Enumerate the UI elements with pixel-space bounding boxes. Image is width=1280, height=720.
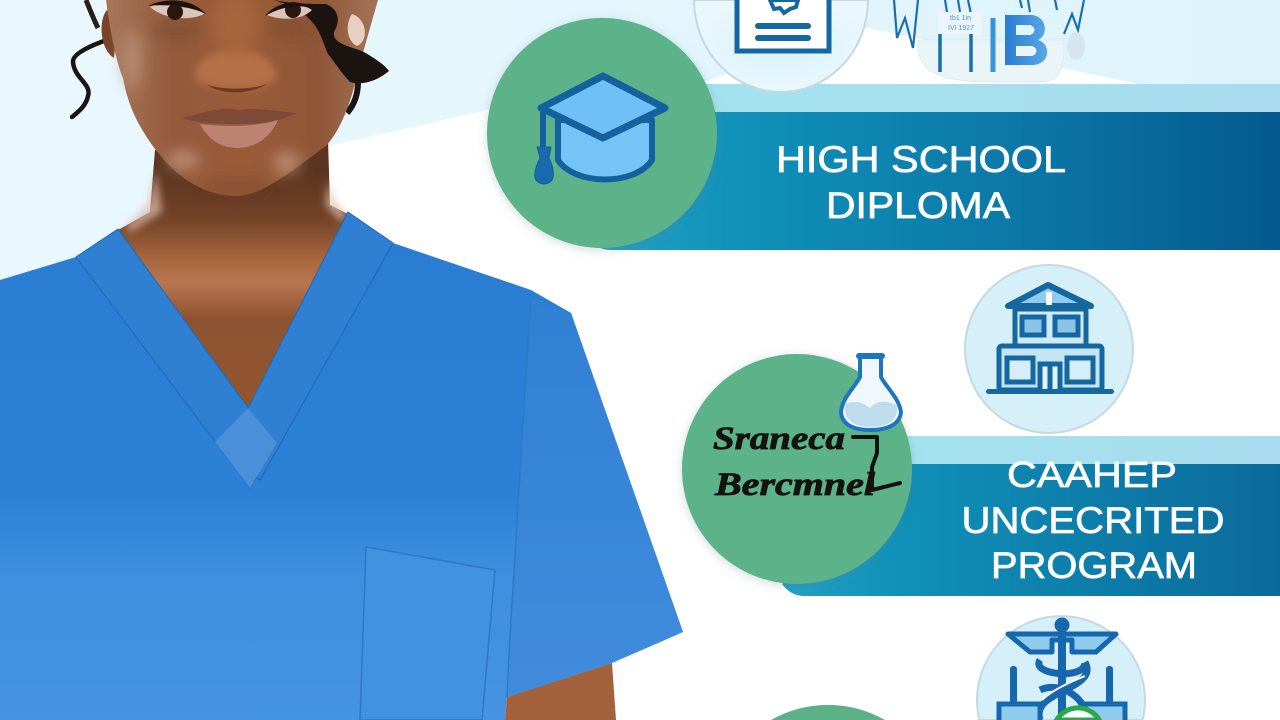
eyes bbox=[148, 0, 315, 20]
collar bbox=[76, 212, 393, 488]
shirt bbox=[0, 212, 683, 720]
handwritten note: Sraneca bbox=[713, 421, 845, 457]
nose bbox=[195, 51, 277, 92]
person in blue scrubs bbox=[0, 0, 683, 720]
icon: certificate disc bbox=[694, 0, 868, 92]
icon: caduceus disc bbox=[977, 616, 1145, 720]
pocket bbox=[360, 547, 495, 720]
icon: flask bbox=[841, 353, 901, 430]
label: CAAHEP bbox=[1007, 454, 1177, 495]
sleeve bbox=[507, 298, 683, 697]
neck highlights bbox=[126, 170, 346, 232]
handwritten note bbox=[713, 421, 900, 503]
label: HIGH SCHOOL bbox=[776, 139, 1066, 180]
step 3 green circle bbox=[771, 705, 885, 720]
sleeve seam bbox=[507, 300, 531, 697]
ear bbox=[102, 10, 118, 58]
neck bbox=[118, 140, 348, 410]
icon: garbled books and IB mark bbox=[894, 0, 1085, 82]
top band bbox=[705, 84, 1280, 112]
top band bbox=[905, 436, 1280, 464]
lips bbox=[182, 109, 297, 148]
step 2: CAAHEP program: PROGRAM bbox=[991, 545, 1197, 586]
green circle bbox=[487, 18, 717, 248]
arm bbox=[505, 663, 616, 720]
hair bbox=[72, 0, 358, 117]
step 2: CAAHEP program bbox=[682, 353, 1280, 596]
icon: garbled books and IB mark: tb1 1in bbox=[950, 15, 971, 22]
handwritten note: Bercmnel bbox=[714, 467, 876, 503]
icon: school building disc bbox=[965, 265, 1133, 433]
front hair bbox=[273, 0, 389, 83]
face shading bbox=[122, 0, 314, 194]
main band bbox=[595, 112, 1280, 250]
green circle bbox=[682, 354, 912, 584]
main band bbox=[782, 464, 1280, 596]
icon: garbled books and IB mark: IVI 1927 bbox=[948, 25, 974, 32]
step 1: high school diploma bbox=[487, 18, 1280, 250]
step 1: high school diploma: DIPLOMA bbox=[826, 185, 1010, 226]
step 2: CAAHEP program: UNCECRITED bbox=[962, 500, 1224, 541]
face bbox=[106, 0, 378, 196]
icon: graduation cap bbox=[535, 76, 665, 184]
